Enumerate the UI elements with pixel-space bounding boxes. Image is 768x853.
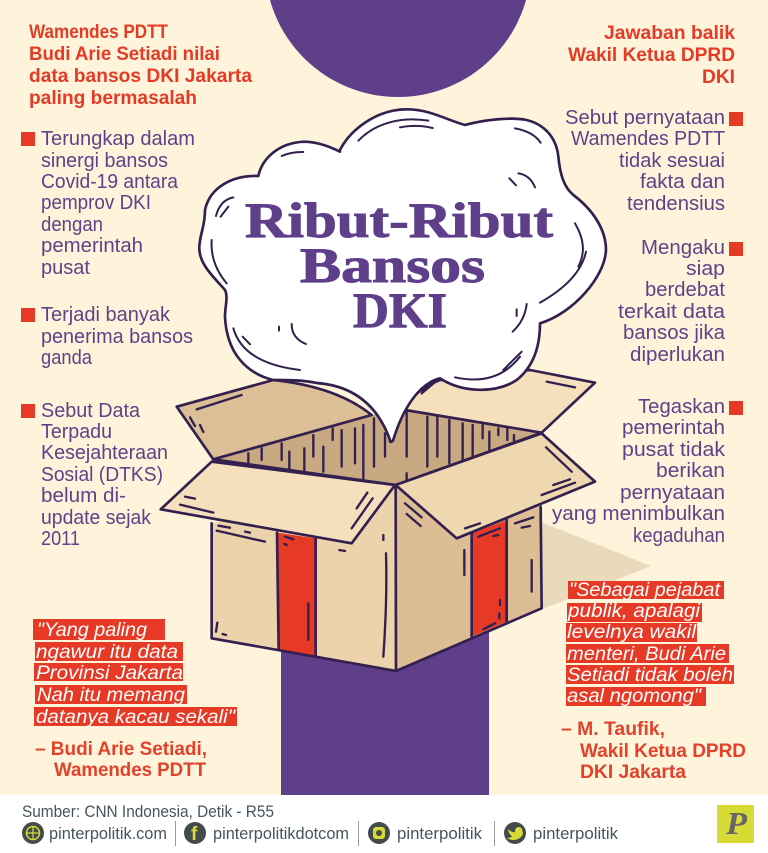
right attribution: Wakil Ketua DPRD [580,740,746,762]
purple stem below box [281,620,489,796]
red tape [277,520,507,656]
right point 2: bansos jika [623,322,726,344]
right heading: Jawaban balik [604,23,735,44]
right point 1: Wamendes PDTT [571,128,725,150]
right quote: Setiadi tidak boleh [567,664,733,686]
left point 3: Kesejahteraan [41,442,168,464]
left quote: "Yang paling [37,619,147,641]
right quote: "Sebagai pejabat [569,579,722,601]
left point 2 [21,304,193,369]
right point 2: berdebat [645,279,725,301]
left quote: Nah itu memang [37,684,185,706]
left point 1: pemprov DKI [41,192,151,214]
title: Ribut-Ribut [245,192,553,248]
social row: f [191,824,198,845]
right quote: levelnya wakil [567,621,697,643]
left attribution: Wamendes PDTT [54,759,206,781]
right point 1: fakta dan [640,171,725,193]
left point 1: Terungkap dalam [41,128,195,150]
left heading: data bansos DKI Jakarta [29,66,252,87]
left point 3: Sosial (DTKS) [41,464,163,486]
left point 1: pusat [41,257,90,279]
social row [22,821,618,846]
right quote: menteri, Budi Arie [567,643,726,665]
right quote: publik, apalagi [567,600,701,622]
right quote [566,579,734,707]
right point 1: tendensius [627,193,725,215]
left quote: datanya kacau sekali" [36,706,236,728]
right point 1 [565,107,743,215]
left attribution [35,738,207,781]
left quote: ngawur itu data [36,641,178,663]
left point 3 [21,400,168,550]
left heading: Budi Arie Setiadi nilai [29,44,220,65]
left point 1: Covid-19 antara [41,171,179,193]
right point 3: pusat tidak [622,439,726,461]
left quote [33,619,237,728]
right point 3: Tegaskan [638,396,725,418]
right attribution [561,718,746,783]
left point 3: 2011 [41,528,80,550]
left point 1: dengan [41,214,103,236]
social row: pinterpolitik [533,824,618,843]
right point 1: tidak sesuai [619,150,725,172]
right point 1: Sebut pernyataan [565,107,725,129]
right heading: Wakil Ketua DPRD [568,45,735,66]
right point 3 [552,396,743,547]
right quote: asal ngomong" [567,685,702,707]
right point 3: pemerintah [622,417,725,439]
left point 1: pemerintah [41,235,143,257]
left point 2: ganda [41,347,93,369]
left point 2: penerima bansos [41,326,193,348]
left point 3: update sejak [41,507,152,529]
right point 3: yang menimbulkan [552,503,725,525]
social row: pinterpolitikdotcom [213,824,349,843]
left point 1: sinergi bansos [41,150,168,172]
cloud speech bubble [199,109,606,442]
right heading [568,23,735,88]
box shadow [540,522,651,610]
left heading: paling bermasalah [29,88,197,109]
left point 3: belum di- [41,485,126,507]
right point 2: terkait data [618,301,726,323]
title: Bansos [300,237,485,293]
left attribution: – Budi Arie Setiadi, [35,738,207,760]
illustration: open cardboard box [161,370,595,671]
left heading [29,22,252,109]
logo [717,805,754,843]
footer [0,795,768,853]
title: DKI [353,282,447,338]
right point 2: Mengaku [641,237,725,259]
right attribution: – M. Taufik, [561,718,665,740]
right point 3: pernyataan [620,482,725,504]
source line: Sumber: CNN Indonesia, Detik - R55 [22,802,274,821]
right heading: DKI [702,67,735,88]
left point 3: Sebut Data [41,400,141,422]
left point 3: Terpadu [41,421,112,443]
left quote: Provinsi Jakarta [36,662,183,684]
left heading: Wamendes PDTT [29,22,168,43]
social row: pinterpolitik.com [49,824,167,843]
right point 3: berikan [656,460,725,482]
right point 2: siap [686,258,725,280]
top purple circle [265,0,531,97]
social row: pinterpolitik [397,824,482,843]
title [245,192,553,338]
logo: P [725,805,747,841]
right point 2: diperlukan [630,344,725,366]
left point 1 [21,128,195,279]
left point 2: Terjadi banyak [41,304,171,326]
right point 2 [618,237,743,366]
right point 3: kegaduhan [633,525,725,547]
right attribution: DKI Jakarta [580,761,686,783]
